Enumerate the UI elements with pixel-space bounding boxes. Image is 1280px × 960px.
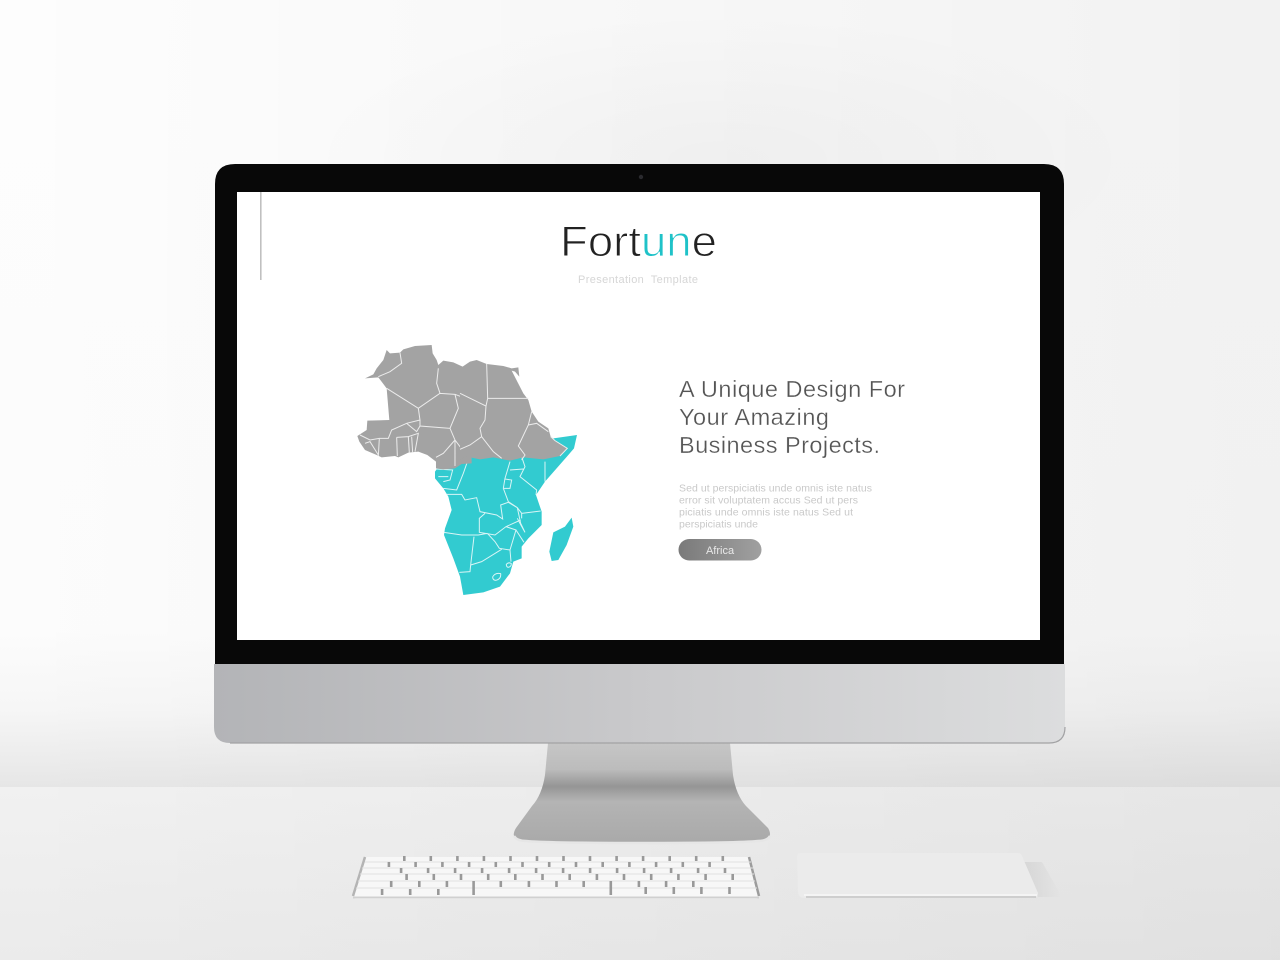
north-east Africa in grey (460, 360, 567, 461)
accent rule (260, 192, 262, 280)
subtitle: Presentation Template (578, 274, 698, 286)
southern Africa in teal (435, 435, 577, 595)
trackpad (797, 853, 1038, 898)
title: Fortune (560, 218, 717, 266)
headline: Business Projects. (679, 432, 880, 458)
monitor stand (514, 743, 770, 844)
body copy: error sit voluptatem accus Sed ut pers (679, 494, 858, 506)
slide screen (237, 192, 1040, 640)
wall glow behind monitor (300, 10, 1140, 310)
map: Africa (357, 345, 577, 595)
body copy (679, 482, 872, 530)
body copy: Sed ut perspiciatis unde omnis iste natus (679, 482, 872, 494)
body copy: piciatis unde omnis iste natus Sed ut (679, 506, 853, 518)
headline (679, 376, 905, 458)
north-west borders (360, 353, 472, 466)
button: Africa: Africa (706, 545, 735, 557)
webcam (639, 175, 643, 179)
body copy: perspiciatis unde (679, 518, 758, 530)
monitor chin (214, 664, 1065, 743)
southern borders (437, 457, 545, 572)
trackpad shadow (1023, 862, 1062, 897)
headline: Your Amazing (679, 404, 829, 430)
keyboard (353, 856, 759, 899)
north-east borders (460, 364, 567, 460)
Lesotho and Eswatini (493, 563, 511, 580)
north-west Africa in grey (357, 345, 472, 469)
button: Africa (678, 539, 762, 560)
monitor bezel (215, 164, 1064, 664)
Madagascar (549, 518, 573, 561)
headline: A Unique Design For (679, 376, 905, 402)
desk surface (0, 787, 1280, 960)
